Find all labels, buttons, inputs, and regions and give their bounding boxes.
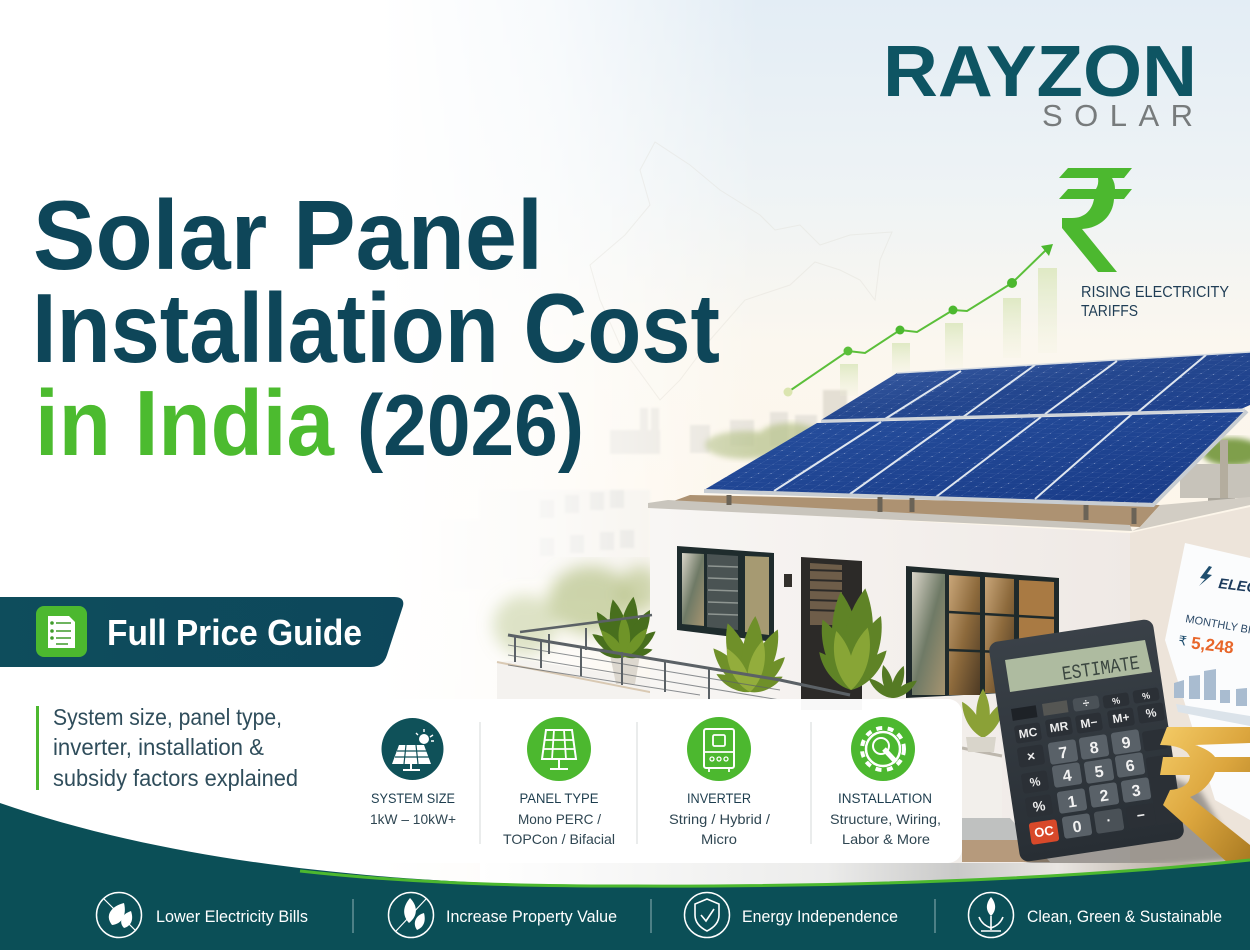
calculator display: ESTIMATE	[1061, 653, 1141, 687]
title: Solar Panel	[33, 180, 543, 290]
installation	[830, 717, 941, 847]
calculator keys: 3	[1131, 782, 1142, 801]
calculator keys: ·	[1105, 812, 1112, 828]
bill baseline band	[1176, 704, 1250, 726]
faint India map outline	[590, 142, 892, 400]
plant left	[589, 596, 659, 684]
inverter	[669, 717, 770, 847]
icon: gold rupee	[1160, 727, 1250, 863]
calculator keys: %	[1141, 690, 1151, 702]
clean green sustainable: Clean, Green & Sustainable	[1027, 907, 1222, 926]
calculator keys: %	[1029, 774, 1042, 790]
bottom curved band	[0, 803, 1250, 950]
band green edge	[300, 860, 1250, 886]
energy independence: Energy Independence	[742, 907, 898, 926]
right window	[906, 566, 1059, 698]
installation: INSTALLATION	[838, 791, 932, 806]
house side wall	[1130, 507, 1250, 870]
door	[801, 557, 862, 710]
calculator keys: −	[1136, 806, 1146, 824]
tariff bars	[840, 268, 1057, 396]
lower wall and terrace by calculator	[962, 748, 1050, 862]
panel frame	[704, 411, 1247, 505]
white left fade	[0, 0, 760, 950]
hazy city skyline	[440, 390, 847, 600]
plant door	[813, 586, 892, 695]
banner label: Full Price Guide	[107, 612, 362, 653]
calculator keys: MC	[1018, 725, 1039, 741]
title	[32, 180, 720, 475]
bill sheet	[1165, 543, 1250, 820]
calculator keys	[1011, 687, 1180, 845]
back row panels	[821, 352, 1250, 420]
rising tariffs label: TARIFFS	[1081, 303, 1138, 320]
panel type	[503, 717, 615, 847]
rising tariffs label	[1081, 284, 1229, 320]
calculator keys: 9	[1121, 734, 1132, 753]
benefit dividers	[353, 899, 935, 933]
roof deck	[668, 495, 1160, 527]
calculator keys: %	[1032, 797, 1047, 815]
house	[648, 495, 1250, 880]
hazy trees	[493, 566, 660, 655]
bill amount: ₹	[1178, 633, 1188, 649]
calculator body	[988, 618, 1185, 863]
system size: SYSTEM SIZE	[371, 791, 455, 806]
lower electricity bills: Lower Electricity Bills	[156, 907, 308, 926]
calculator keys: 5	[1094, 763, 1105, 782]
panel legs	[729, 495, 1134, 524]
increase property value: Increase Property Value	[446, 907, 617, 926]
clean green sustainable	[968, 892, 1222, 938]
calculator keys: OC	[1033, 823, 1055, 840]
plant low	[866, 664, 919, 701]
price guide banner	[0, 597, 403, 667]
calculator keys: M+	[1112, 710, 1130, 726]
logo: RAYZON	[883, 32, 1197, 112]
subtitle text: inverter, installation &	[53, 734, 264, 760]
title: Installation Cost	[32, 273, 720, 383]
rising tariffs label: RISING ELECTRICITY	[1081, 284, 1229, 301]
logo: SOLAR	[1042, 98, 1193, 133]
installation: Structure, Wiring,	[830, 811, 941, 827]
calculator keys: %	[1145, 705, 1158, 721]
calculator keys: 0	[1072, 818, 1083, 837]
balcony railing	[508, 615, 850, 700]
bill amount: 5,248	[1190, 633, 1235, 657]
lower strip below card	[480, 863, 1250, 889]
increase property value	[388, 892, 617, 938]
panel type: TOPCon / Bifacial	[503, 831, 615, 847]
lower electricity bills	[96, 892, 308, 938]
title: in India	[35, 371, 335, 475]
calculator shadow	[1000, 700, 1240, 876]
title: (2026)	[357, 378, 584, 474]
panel type: Mono PERC /	[518, 811, 601, 827]
calculator keys: 8	[1089, 739, 1100, 758]
calculator keys: ÷	[1082, 696, 1091, 710]
calculator keys: M−	[1080, 715, 1098, 731]
bill bars	[1174, 669, 1247, 706]
potted plants	[589, 586, 1009, 752]
calculator display	[1005, 640, 1152, 692]
right terrace floor	[1132, 497, 1250, 531]
calculator keys: 1	[1067, 793, 1078, 812]
system size	[370, 718, 456, 827]
calculator keys: MR	[1049, 719, 1070, 735]
bolt icon	[1199, 566, 1212, 586]
wall lamp	[784, 574, 792, 587]
calculator keys: ×	[1026, 747, 1036, 765]
parapet	[648, 500, 1132, 531]
scene behind roof	[1180, 438, 1250, 507]
plant middle	[707, 615, 790, 697]
left window	[677, 546, 774, 642]
front row panels	[704, 410, 1245, 503]
benefits row	[96, 892, 1222, 938]
rising tariff line chart with arrow	[784, 244, 1053, 396]
panel type: PANEL TYPE	[520, 791, 598, 806]
house wall	[650, 507, 1130, 880]
calculator keys: 4	[1062, 767, 1073, 786]
factor card	[346, 699, 962, 863]
calculator keys: %	[1111, 695, 1121, 707]
subtitle text: System size, panel type,	[53, 704, 282, 730]
calculator keys: 6	[1125, 757, 1136, 776]
installation: Labor & More	[842, 831, 930, 847]
solar panel array	[704, 352, 1250, 524]
subtitle text: subsidy factors explained	[53, 765, 298, 791]
icon: price document	[36, 606, 87, 657]
calculator	[988, 618, 1240, 876]
plant right of card	[957, 689, 1009, 741]
icon: green rupee	[1059, 168, 1132, 272]
calculator keys: 2	[1099, 787, 1110, 806]
card dividers	[480, 722, 811, 844]
inverter: Micro	[701, 831, 737, 847]
inverter: INVERTER	[687, 791, 751, 806]
calculator keys: 7	[1058, 744, 1069, 763]
system size: 1kW – 10kW+	[370, 811, 456, 827]
pot right	[966, 737, 996, 752]
energy independence	[684, 892, 898, 938]
balcony slab	[497, 660, 960, 865]
subtitle text	[36, 704, 298, 791]
inverter: String / Hybrid /	[669, 811, 770, 827]
